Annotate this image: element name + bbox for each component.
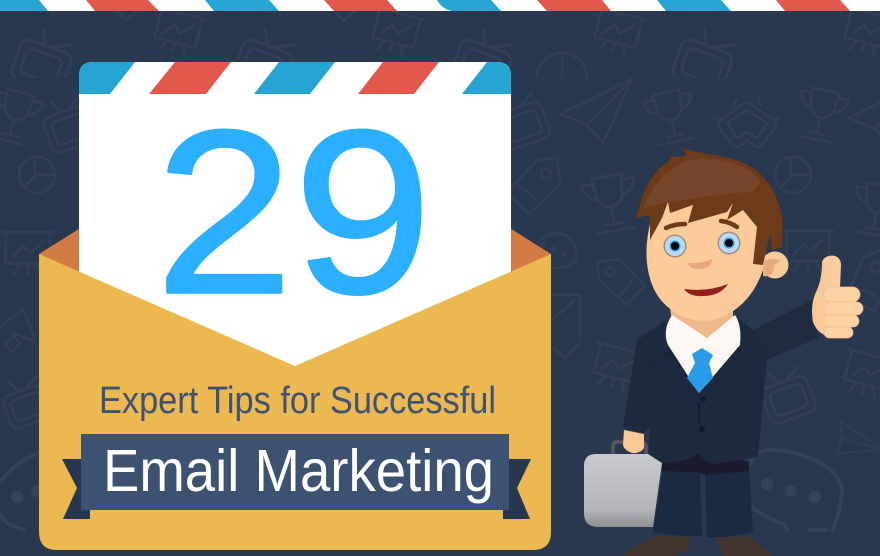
ribbon tails [62,459,531,519]
hair highlight [644,159,760,208]
businessman character [584,148,863,556]
lapels [648,345,750,392]
ear [762,252,788,278]
jacket [623,317,767,464]
briefcase handle [613,442,646,454]
trousers [653,468,753,537]
number 29: 29 [155,82,432,342]
belt [662,450,749,475]
envelope front [39,254,551,550]
shoes [623,536,772,556]
eyes [664,232,740,258]
top airmail stripe [0,0,880,11]
tie [687,348,713,393]
jacket buttons [699,396,706,432]
subtitle: Expert Tips for Successful [99,380,496,422]
letter airmail stripes [79,62,511,94]
thumbs-up hand [812,256,863,338]
holding hand [623,430,644,453]
raised arm [735,300,818,372]
ribbon banner [81,434,509,510]
shirt [666,315,740,393]
banner title: Email Marketing [103,438,494,504]
hair [636,148,783,265]
letter card [79,62,511,370]
mouth [684,284,728,296]
briefcase [584,454,662,527]
face [646,190,770,321]
envelope back flap [39,222,551,300]
nose [688,259,712,269]
eyebrows [666,221,737,228]
neck [670,308,733,338]
